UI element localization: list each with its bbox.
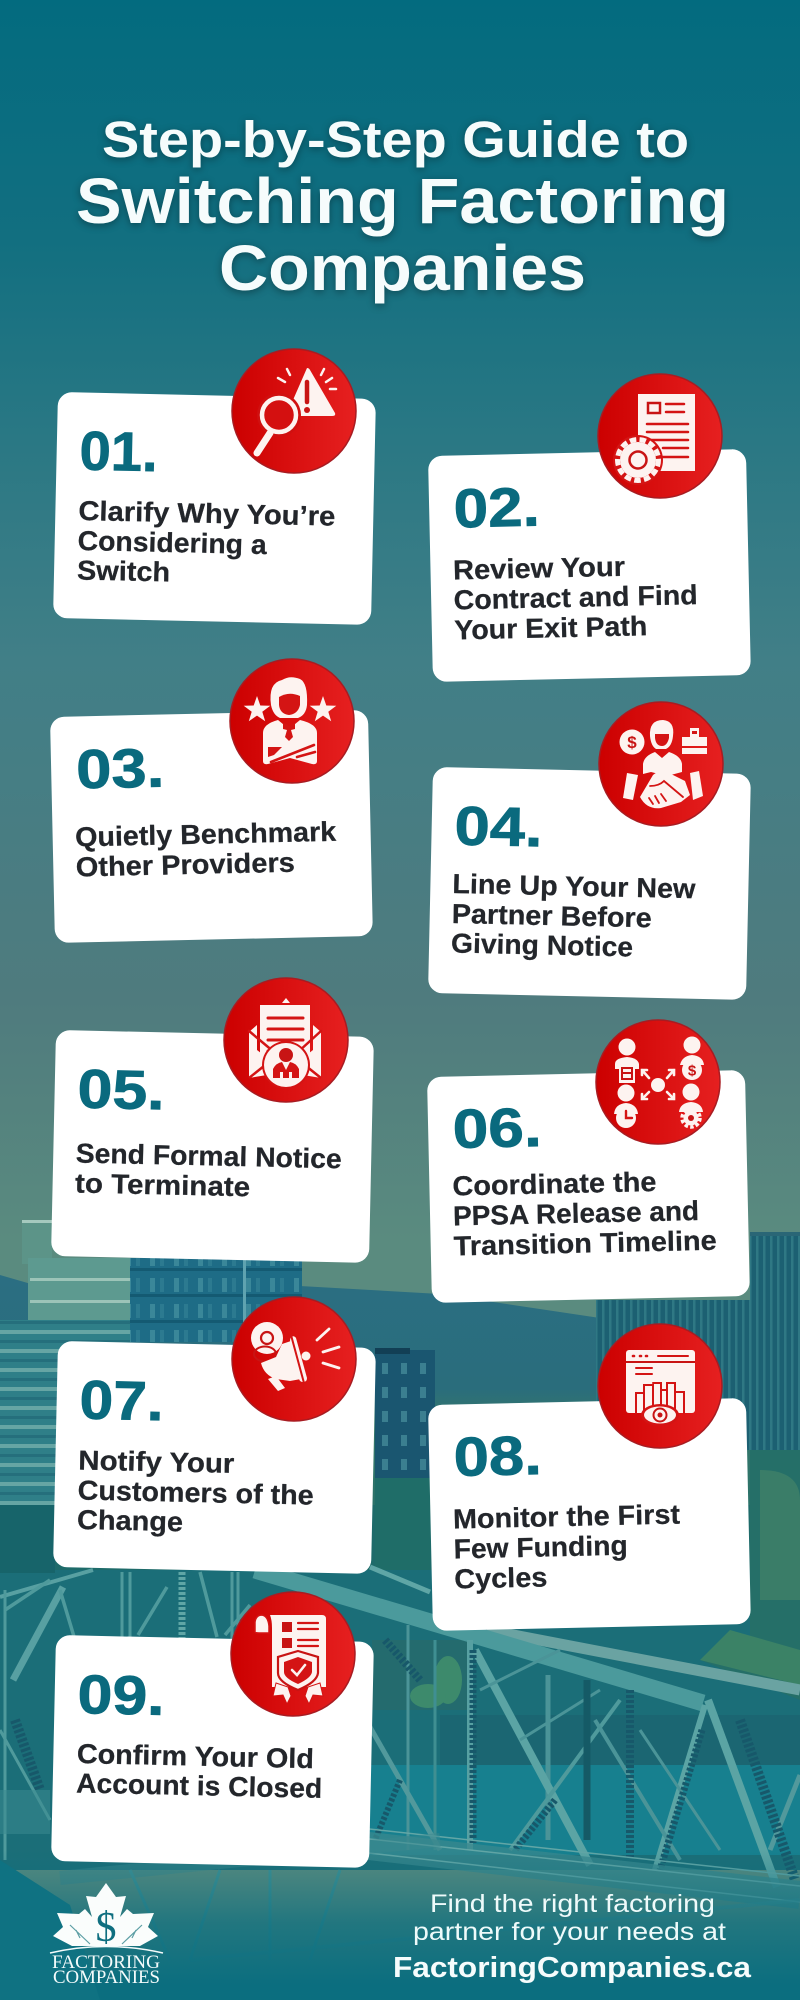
card 04 [428, 767, 751, 1000]
panel: step 03 [50, 659, 373, 943]
logo: Factoring Companies maple leaf: FACTORING [52, 1952, 160, 1973]
card 05: Send Formal Notice [75, 1137, 342, 1174]
card 02 [428, 449, 751, 682]
card 05: 05. [77, 1057, 165, 1121]
icon: browser window with bar chart and eye [598, 1324, 722, 1448]
card 02: 02. [453, 476, 540, 539]
card 07 [53, 1341, 376, 1574]
card 08: Monitor the First [453, 1498, 680, 1534]
icon: certificate with shield and ribbon [231, 1592, 355, 1716]
card 04: 04. [454, 794, 543, 858]
call to action text: partner for your needs at [413, 1918, 726, 1946]
card 01: Considering a [77, 525, 268, 560]
panel: step 04 [428, 702, 751, 1000]
logo: Factoring Companies maple leaf: $ [96, 1905, 116, 1951]
card 09: 09. [77, 1663, 165, 1727]
card 04: Giving Notice [451, 927, 633, 962]
icon: four people connected by arrows [596, 1020, 720, 1144]
card 04: Line Up Your New [452, 868, 696, 904]
card 03: 03. [75, 737, 165, 800]
panel: step 08 [428, 1324, 751, 1631]
card 01: Clarify Why You’re [78, 495, 336, 532]
title: Companies [219, 232, 586, 304]
background: city and bridge photo scene [0, 1220, 800, 2000]
title: Step-by-Step Guide to [102, 111, 689, 168]
card 08 [428, 1398, 751, 1631]
card 06: PPSA Release and [453, 1195, 699, 1231]
card 02: Your Exit Path [454, 610, 648, 645]
card 07: Customers of the [77, 1474, 314, 1511]
card 01: Switch [77, 554, 170, 588]
card 09: Account is Closed [76, 1767, 323, 1804]
card 08: Cycles [454, 1561, 548, 1594]
title [76, 111, 729, 304]
panel: step 01 [53, 349, 376, 625]
card 06: Transition Timeline [453, 1225, 717, 1261]
panel: step 02 [428, 374, 751, 682]
call to action text: Find the right factoring [430, 1890, 715, 1918]
logo: Factoring Companies maple leaf [50, 1883, 163, 1988]
card 06: Coordinate the [452, 1166, 657, 1201]
card 01: 01. [79, 419, 158, 483]
icon: document with gear [598, 374, 722, 498]
logo: Factoring Companies maple leaf: COMPANIES [53, 1967, 160, 1988]
card 06 [427, 1070, 750, 1303]
card 07: Notify Your [78, 1444, 235, 1479]
card 03: Quietly Benchmark [75, 816, 337, 852]
card 09: Confirm Your Old [77, 1738, 314, 1774]
icon: envelope with letter and person [224, 978, 348, 1102]
icon: four people connected by arrows: $ [688, 1062, 697, 1080]
card 07: Change [77, 1504, 183, 1537]
card 06: 06. [452, 1096, 542, 1160]
card 04: Partner Before [451, 898, 652, 933]
panel: step 09 [51, 1592, 374, 1868]
panel: step 06 [427, 1020, 750, 1303]
icon: handshake with dollar and briefcase: $ [627, 733, 637, 752]
icon: magnifier and warning triangle [232, 349, 356, 473]
icon: handshake with dollar and briefcase [599, 702, 723, 826]
panel: step 07 [53, 1297, 376, 1574]
card 03 [50, 710, 373, 943]
card 08: Few Funding [453, 1530, 628, 1564]
card 05: to Terminate [75, 1167, 250, 1202]
card 01 [53, 392, 376, 625]
icon: person with megaphone [232, 1297, 356, 1421]
card 07: 07. [79, 1368, 164, 1432]
card 05 [51, 1030, 374, 1263]
card 08: 08. [453, 1424, 542, 1488]
card 09 [51, 1635, 374, 1868]
call to action text [393, 1890, 752, 1984]
call to action text: FactoringCompanies.ca [393, 1952, 752, 1984]
icon: person with stars [230, 659, 354, 783]
panel: step 05 [51, 978, 374, 1263]
card 02: Review Your [453, 551, 626, 585]
title: Switching Factoring [76, 165, 729, 237]
card 02: Contract and Find [453, 579, 698, 615]
card 03: Other Providers [75, 847, 295, 882]
